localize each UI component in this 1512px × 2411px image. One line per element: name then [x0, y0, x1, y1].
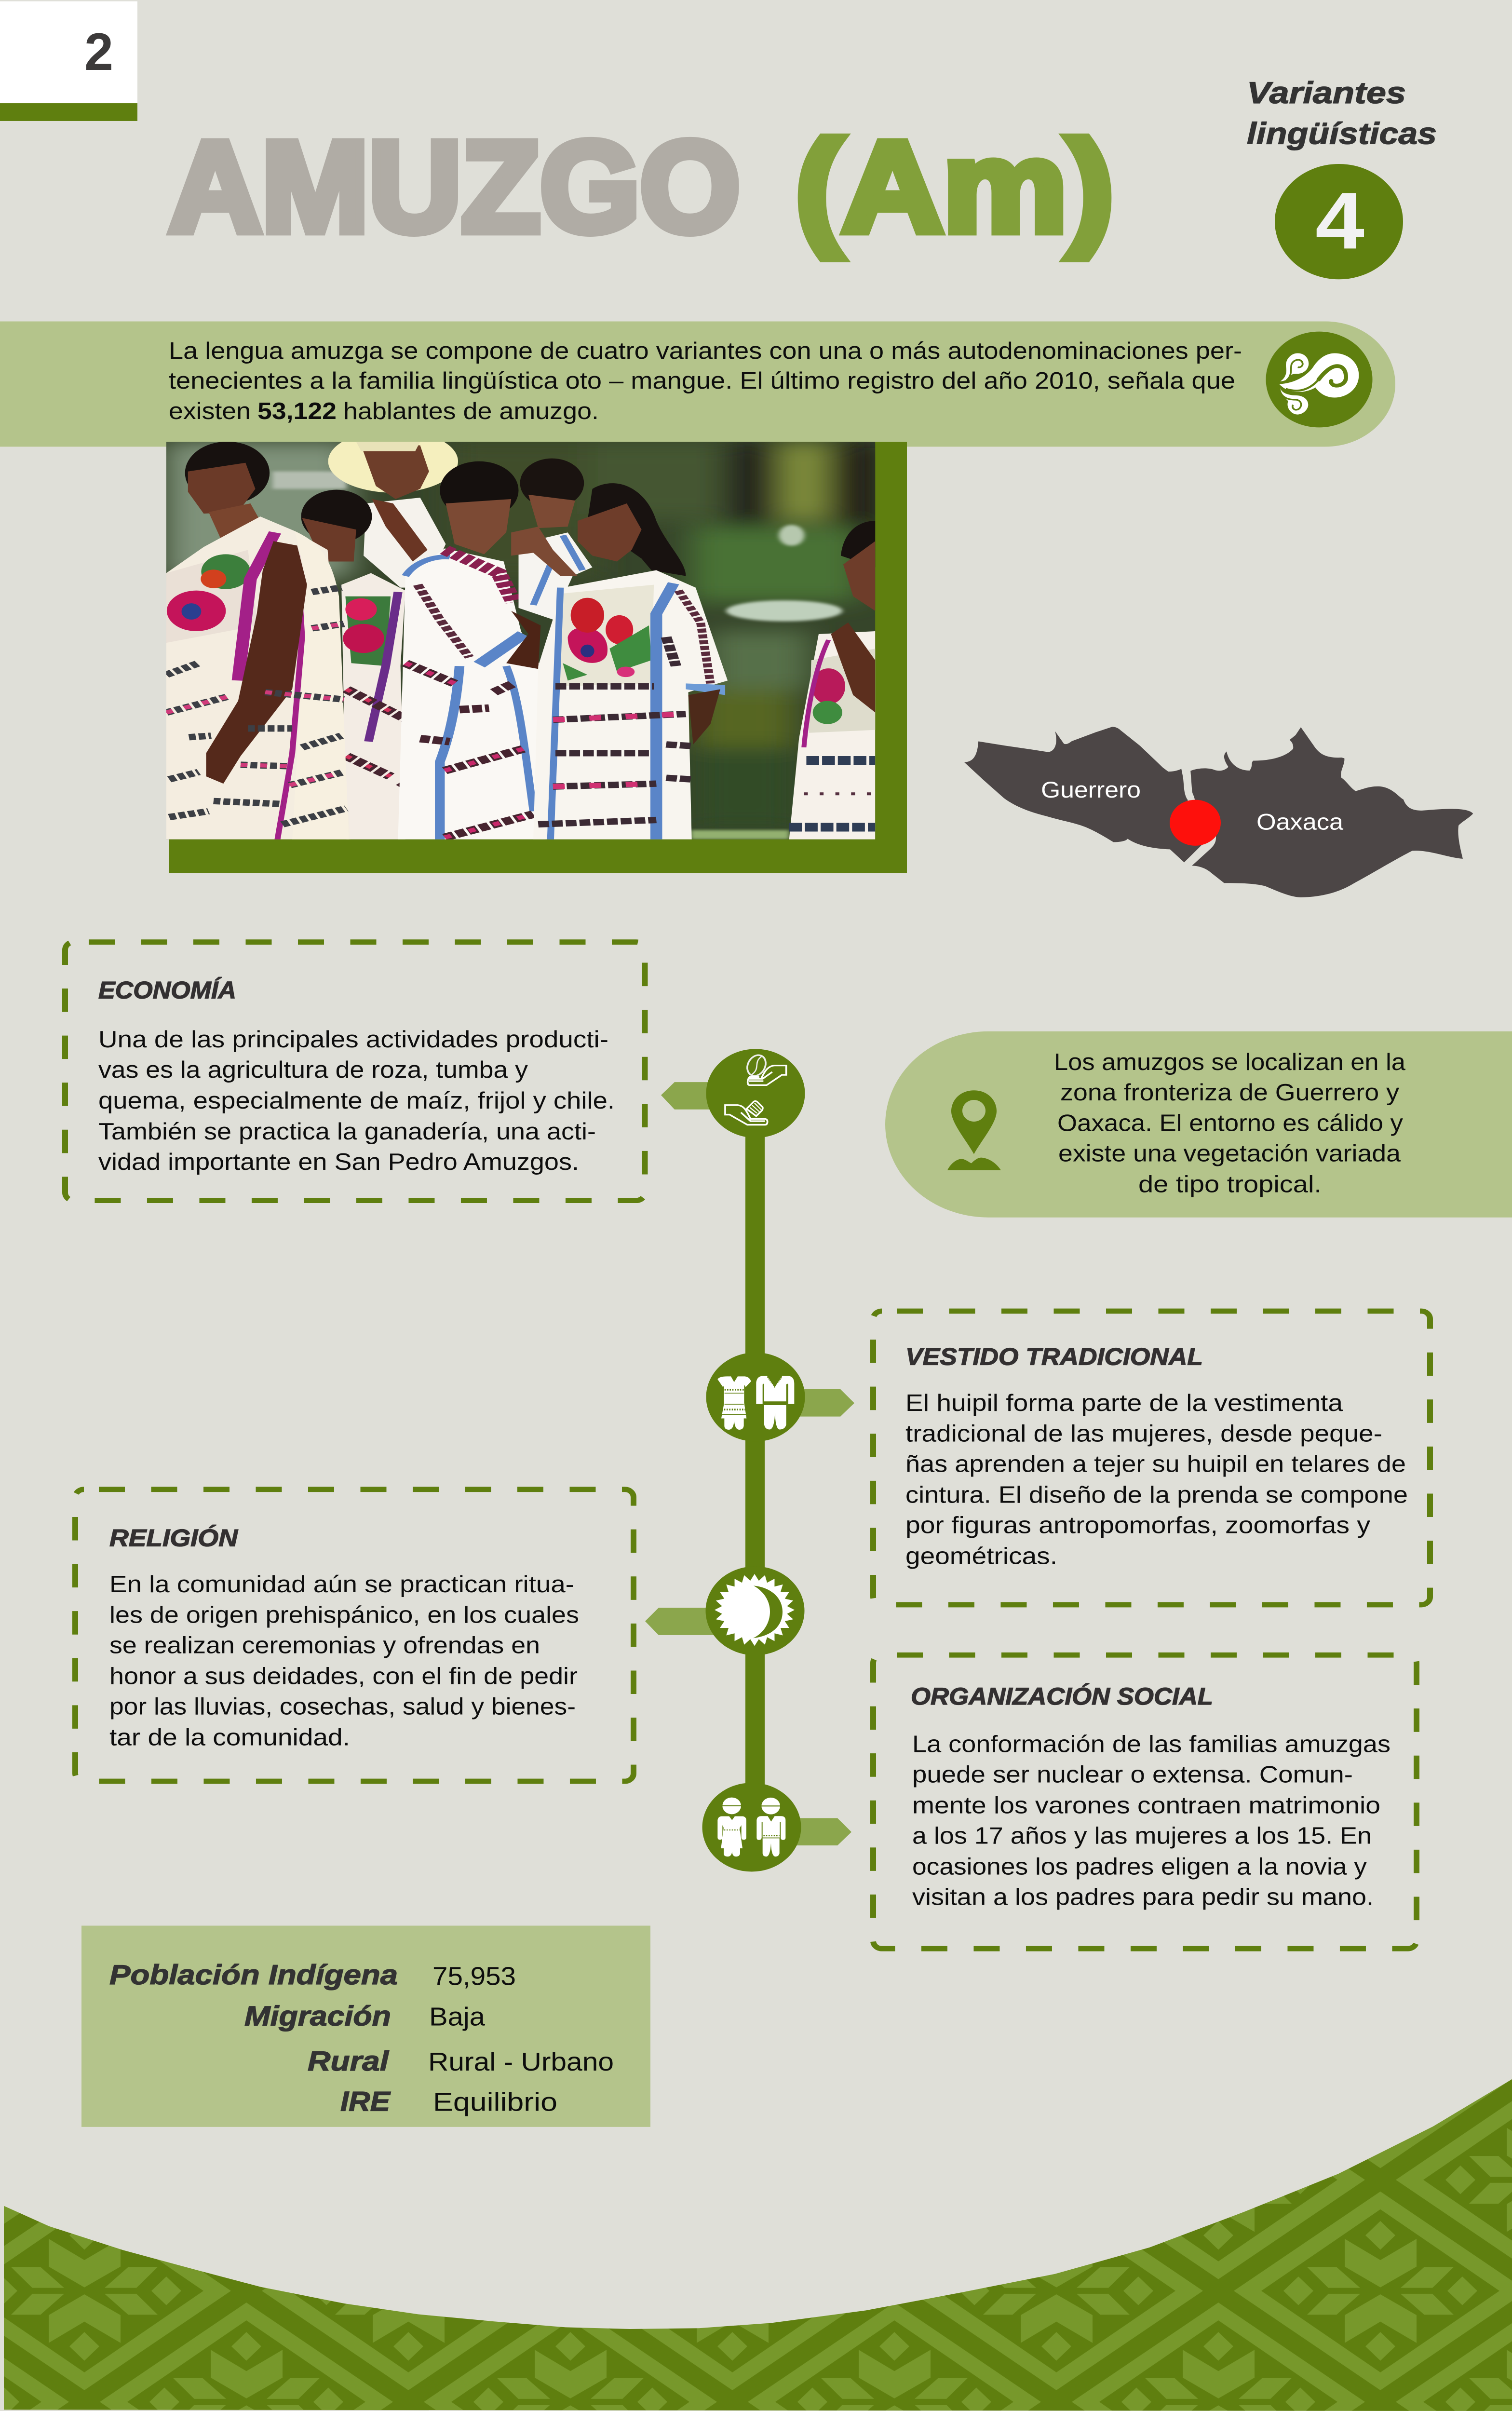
photo backing block: [169, 442, 907, 873]
text: vestido tradicional: geométricas.: [905, 1543, 1057, 1570]
variantes lingüísticas counter: [1247, 76, 1437, 279]
arrow: religión: [645, 1608, 718, 1635]
heading: organización social: ORGANIZACIÓN SOCIAL: [911, 1682, 1213, 1710]
stat: IRE: IRE: [340, 2086, 391, 2117]
variantes lingüísticas counter: 4: [1315, 176, 1364, 266]
panel: economía: [65, 942, 645, 1201]
page number tab: [0, 1, 137, 121]
text: organización social: visitan a los padres para pedir su mano.: [912, 1884, 1374, 1910]
icon: hands and seeds: [706, 1049, 805, 1138]
text: economía: quema, especialmente de maíz, frijol y chile.: [98, 1087, 615, 1114]
text: organización social: ocasiones los padres eligen a la novia y: [912, 1854, 1367, 1880]
text: economía: [98, 1027, 615, 1175]
woman left: [166, 442, 351, 840]
icon: traditional clothing: [706, 1353, 805, 1441]
arrow: organización social: [791, 1818, 851, 1845]
text: religión: [109, 1571, 579, 1751]
text: organización social: mente los varones contraen matrimonio: [912, 1792, 1380, 1819]
heading: vestido tradicional: VESTIDO TRADICIONAL: [905, 1343, 1203, 1370]
intro banner: [0, 321, 1395, 447]
intro text: 53,122: [257, 398, 337, 424]
location pill: [885, 1031, 1512, 1218]
text: organización social: La conformación de las familias amuzgas: [912, 1731, 1390, 1758]
icon: swirl: [1266, 332, 1372, 427]
stat: población indígena: [109, 1959, 516, 1991]
text: vestido tradicional: ñas aprenden a tejer su huipil en telares de: [905, 1451, 1406, 1477]
text: religión: se realizan ceremonias y ofrendas en: [109, 1632, 540, 1659]
icon: location pin: [947, 1090, 1001, 1170]
title: (Am): [796, 114, 1114, 259]
variantes lingüísticas counter: lingüísticas: [1247, 117, 1437, 151]
text: economía: Una de las principales actividades producti-: [98, 1027, 608, 1053]
panel: religión: [75, 1490, 634, 1781]
intro text: [169, 338, 1242, 424]
intro text: La lengua amuzga se compone de cuatro variantes con una o más autodenominaciones per-: [169, 338, 1242, 364]
text: vestido tradicional: [905, 1390, 1408, 1570]
map marker: [1170, 800, 1221, 846]
woman centre: [398, 461, 546, 840]
stats panel: [81, 1926, 650, 2127]
text: vestido tradicional: por figuras antropomorfas, zoomorfas y: [905, 1512, 1371, 1539]
variantes lingüísticas counter: Variantes: [1247, 76, 1406, 110]
woven pattern footer: [4, 2079, 1512, 2411]
location text: Oaxaca. El entorno es cálido y: [1057, 1110, 1404, 1137]
icon: sun and moon: [706, 1566, 804, 1655]
text: religión: por las lluvias, cosechas, salud y bienes-: [109, 1693, 576, 1720]
stat: rural: [308, 2045, 614, 2076]
map of Guerrero and Oaxaca: [964, 727, 1473, 897]
text: economía: vidad importante en San Pedro Amuzgos.: [98, 1149, 579, 1175]
stat: población indígena: 75,953: [432, 1962, 516, 1991]
stat: rural: Rural - Urbano: [428, 2047, 614, 2076]
location text: Los amuzgos se localizan en la: [1054, 1049, 1406, 1075]
text: organización social: [912, 1731, 1390, 1910]
text: vestido tradicional: cintura. El diseño de la prenda se compone: [905, 1482, 1408, 1508]
text: economía: También se practica la ganadería, una acti-: [98, 1118, 596, 1145]
stat: población indígena: Población Indígena: [109, 1959, 398, 1990]
icon: man and woman: [702, 1783, 801, 1872]
stat: migración: Baja: [429, 2002, 485, 2032]
stat: IRE: [340, 2086, 557, 2117]
text: vestido tradicional: tradicional de las mujeres, desde peque-: [905, 1421, 1382, 1447]
location text: zona fronteriza de Guerrero y: [1060, 1079, 1400, 1106]
stat: IRE: Equilibrio: [433, 2087, 557, 2117]
map labels: [1041, 777, 1344, 835]
panel: vestido tradicional: [873, 1311, 1430, 1605]
arrow: economía: [661, 1082, 714, 1110]
text: religión: honor a sus deidades, con el fin de pedir: [109, 1663, 578, 1690]
map labels: Oaxaca: [1256, 809, 1344, 835]
map labels: Guerrero: [1041, 777, 1141, 802]
woman far right: [789, 521, 875, 840]
text: organización social: puede ser nuclear o extensa. Comun-: [912, 1761, 1353, 1788]
location text: existe una vegetación variada: [1058, 1140, 1401, 1167]
title: AMUZGO: [169, 114, 740, 258]
text: economía: vas es la agricultura de roza, tumba y: [98, 1057, 528, 1083]
stat: migración: Migración: [244, 2000, 391, 2032]
heading: religión: RELIGIÓN: [109, 1524, 239, 1552]
woman right, main: [533, 483, 728, 840]
text: religión: tar de la comunidad.: [109, 1724, 350, 1751]
photo: women in embroidered huipiles: [166, 430, 875, 840]
location text: de tipo tropical.: [1138, 1171, 1322, 1198]
text: religión: En la comunidad aún se practican ritua-: [109, 1571, 574, 1598]
panel: organización social: [873, 1655, 1417, 1949]
child: [511, 459, 593, 620]
intro text: hablantes de amuzgo.: [343, 398, 599, 424]
heading: economía: ECONOMÍA: [98, 976, 236, 1004]
page number tab: 2: [84, 22, 113, 81]
intro text: tenecientes a la familia lingüística oto – mangue. El último registro del año 2010, señala que: [169, 367, 1235, 394]
title: [169, 114, 1114, 259]
text: organización social: a los 17 años y las mujeres a los 15. En: [912, 1823, 1372, 1849]
woman at back: [301, 490, 405, 840]
timeline bar: [745, 1128, 765, 1796]
stat: migración: [244, 2000, 485, 2032]
arrow: vestido: [796, 1389, 854, 1417]
location text: [1054, 1049, 1406, 1198]
intro text: existen: [169, 398, 251, 424]
man with hat: [328, 430, 458, 588]
text: religión: les de origen prehispánico, en los cuales: [109, 1602, 579, 1628]
stat: rural: Rural: [308, 2045, 389, 2076]
text: vestido tradicional: El huipil forma parte de la vestimenta: [905, 1390, 1343, 1416]
